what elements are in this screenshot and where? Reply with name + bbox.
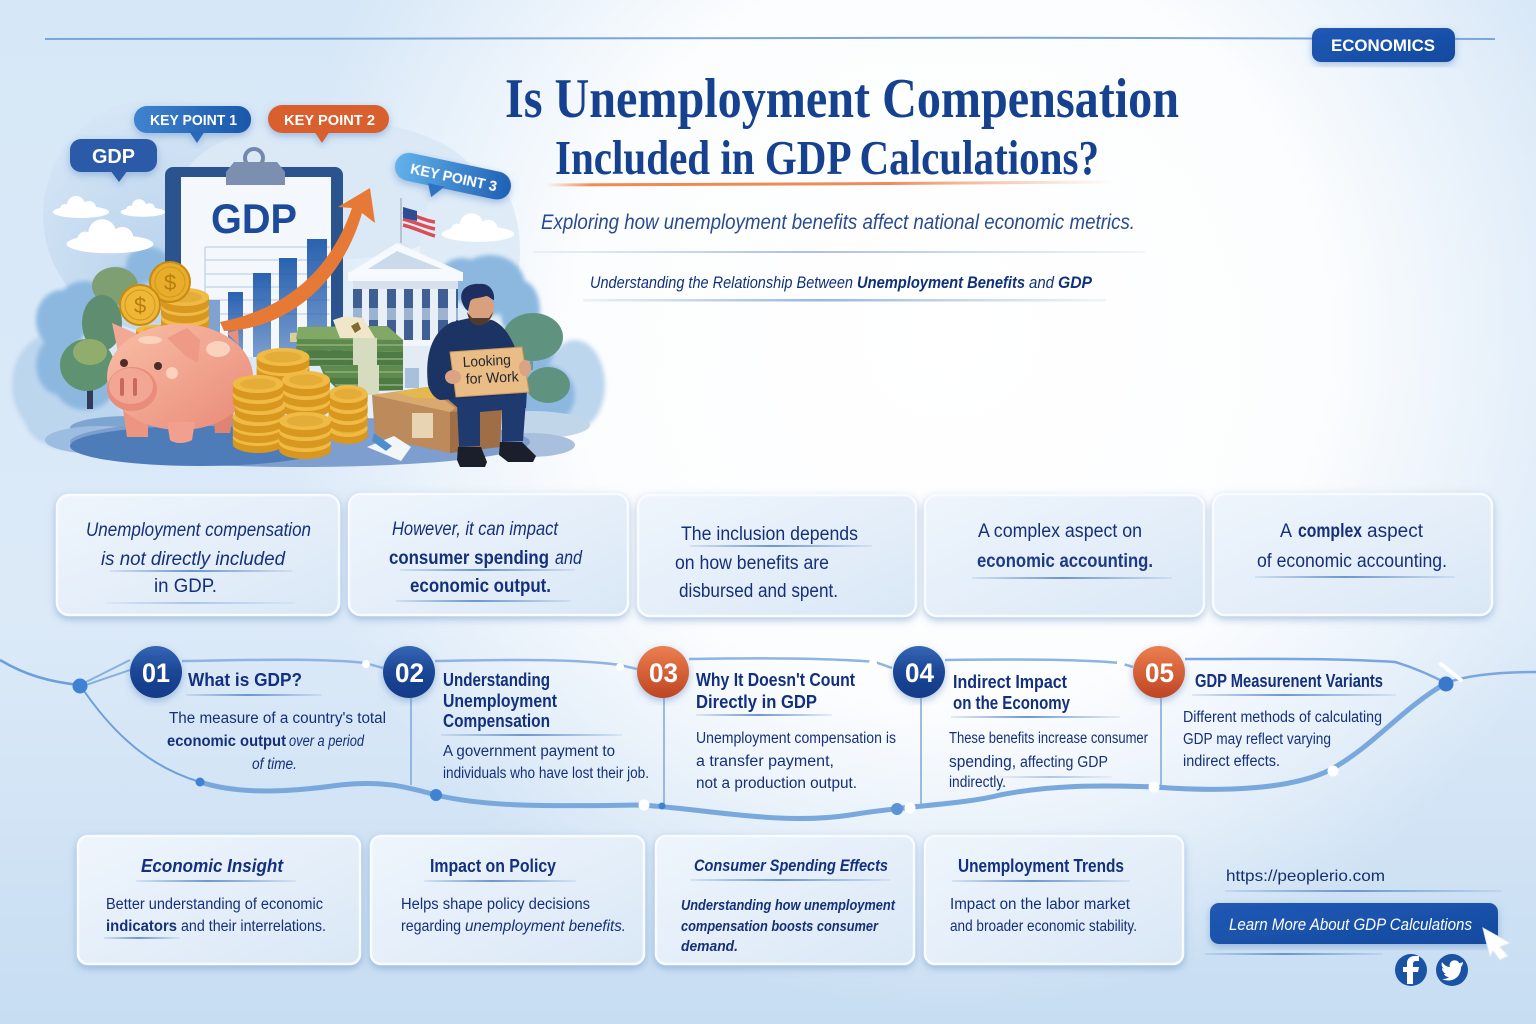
panel: card 1: in GDP. bbox=[154, 576, 217, 597]
step 01: What is GDP? bbox=[188, 670, 302, 690]
badge 03 bbox=[637, 646, 689, 698]
step 04: affecting GDP bbox=[1020, 754, 1108, 771]
panel: card 5 bbox=[1213, 494, 1492, 615]
icon: twitter bbox=[1436, 954, 1468, 986]
step 04: on the Economy bbox=[953, 693, 1070, 713]
rising arrow bbox=[220, 188, 375, 331]
step 02: individuals who have lost their job. bbox=[443, 765, 649, 782]
step 03: Directly in GDP bbox=[696, 692, 817, 712]
step 02: Compensation bbox=[443, 711, 550, 731]
clouds bbox=[53, 196, 514, 253]
man looking for work bbox=[427, 284, 536, 467]
title: Included in GDP Calculations? bbox=[555, 130, 1099, 185]
piggy bank bbox=[107, 323, 253, 443]
panel: economic insight bbox=[78, 836, 360, 964]
title bbox=[505, 68, 1179, 185]
capitol building with flag bbox=[348, 198, 463, 388]
tag: economics: ECONOMICS bbox=[1331, 36, 1435, 55]
panel: economic insight: Better understanding of economic bbox=[106, 896, 323, 913]
panel: impact on policy bbox=[371, 836, 644, 964]
panel: card 5: of economic accounting. bbox=[1257, 551, 1447, 572]
step 04 bbox=[893, 646, 1148, 791]
gold coins behind pig: $ bbox=[164, 270, 176, 295]
step 04: spending, bbox=[949, 753, 1016, 771]
panel: impact on policy: unemployment benefits. bbox=[465, 918, 626, 935]
badge 01: 01 bbox=[142, 658, 170, 688]
gold coins behind pig bbox=[120, 262, 209, 340]
boots bbox=[457, 442, 536, 467]
step 03: Why It Doesn't Count bbox=[696, 670, 855, 690]
panel: card 2: However, it can impact bbox=[392, 519, 559, 540]
sub-heading: GDP bbox=[1058, 273, 1093, 292]
panel: card 2 bbox=[349, 494, 628, 615]
badge 05: 05 bbox=[1145, 658, 1174, 688]
panel: card 3: disbursed and spent. bbox=[679, 581, 838, 602]
panel: consumer spending effects: Understanding how unemployment bbox=[681, 897, 896, 914]
panel: consumer spending effects bbox=[656, 836, 914, 964]
illustration: economy scene bbox=[12, 98, 605, 467]
step 02: A government payment to bbox=[443, 743, 615, 760]
sign: for Work bbox=[465, 369, 520, 388]
badge: key point 1: KEY POINT 1 bbox=[150, 113, 237, 129]
sub-heading: and bbox=[1029, 273, 1054, 292]
step 01 bbox=[130, 646, 386, 773]
step 02 bbox=[383, 646, 649, 782]
panel: economic insight: Economic Insight bbox=[141, 856, 284, 876]
title underline bbox=[546, 182, 1116, 185]
badge 03: 03 bbox=[649, 658, 678, 688]
button: learn more: Learn More About GDP Calculations bbox=[1229, 916, 1472, 934]
step 01: The measure of a country's total bbox=[169, 710, 386, 727]
top rule bbox=[45, 38, 1495, 39]
button: learn more bbox=[1210, 903, 1498, 944]
title: Is Unemployment Compensation bbox=[505, 68, 1179, 130]
badge 02: 02 bbox=[395, 658, 424, 688]
panel: card 4 bbox=[925, 495, 1204, 616]
step 01: economic output bbox=[167, 733, 286, 750]
legs bbox=[443, 390, 527, 447]
step 04: Indirect Impact bbox=[953, 672, 1067, 692]
step 05: indirect effects. bbox=[1183, 753, 1280, 770]
sub-heading bbox=[590, 273, 1093, 292]
green trees bbox=[60, 267, 570, 409]
panel: card 3: on how benefits are bbox=[675, 553, 829, 574]
cardboard box bbox=[372, 387, 502, 453]
panel: card 2: and bbox=[555, 548, 583, 569]
panel: unemployment trends: Unemployment Trends bbox=[958, 856, 1124, 876]
step 05: GDP Measurenent Variants bbox=[1195, 671, 1383, 691]
panel: card 3 bbox=[638, 495, 916, 616]
badge 04 bbox=[893, 646, 945, 698]
panel: unemployment trends bbox=[925, 836, 1183, 964]
panel: card 4: A complex aspect on bbox=[978, 521, 1142, 542]
badge 02 bbox=[383, 646, 435, 698]
step 03 bbox=[637, 646, 896, 792]
clipboard with GDP chart bbox=[165, 149, 343, 357]
panel: impact on policy: Impact on Policy bbox=[430, 856, 556, 876]
sign bbox=[450, 347, 529, 397]
website link: https://peoplerio.com bbox=[1226, 868, 1385, 885]
badge 05 bbox=[1133, 646, 1185, 698]
panel: unemployment trends: and broader economic stability. bbox=[950, 918, 1137, 935]
cash stack bbox=[290, 316, 403, 395]
panel: unemployment trends: Impact on the labor market bbox=[950, 896, 1131, 913]
step 01: of time. bbox=[252, 756, 297, 773]
panel: consumer spending effects: compensation boosts consumer bbox=[681, 918, 879, 935]
badge: key point 2 bbox=[268, 105, 389, 143]
panel: economic insight: indicators bbox=[106, 918, 177, 935]
backdrop blobs bbox=[12, 98, 605, 450]
panel: card 3: The inclusion depends bbox=[681, 524, 858, 545]
badge 01 bbox=[130, 646, 182, 698]
sub-heading: Understanding the Relationship Between bbox=[590, 273, 853, 292]
panel: consumer spending effects: Consumer Spending Effects bbox=[694, 856, 888, 875]
panel: card 5: aspect bbox=[1367, 521, 1424, 542]
panel: card 1 bbox=[57, 495, 339, 615]
badge: key point 3 bbox=[390, 150, 514, 213]
step 02: Understanding bbox=[443, 670, 550, 690]
step 02: Unemployment bbox=[443, 691, 557, 711]
step 04: indirectly. bbox=[949, 774, 1006, 791]
panel: card 1: Unemployment compensation bbox=[86, 520, 311, 541]
head bbox=[461, 284, 494, 326]
step 04: These benefits increase consumer bbox=[949, 730, 1148, 747]
badge 04: 04 bbox=[905, 658, 934, 688]
step 05 bbox=[1133, 646, 1396, 770]
panel: consumer spending effects: demand. bbox=[681, 938, 738, 955]
gold coin stacks bbox=[233, 348, 368, 459]
panel: impact on policy: regarding bbox=[401, 918, 461, 935]
sign: Looking bbox=[462, 353, 511, 371]
badge: key point 3: KEY POINT 3 bbox=[409, 161, 498, 195]
badge: GDP bbox=[70, 139, 157, 182]
panel: card 1: is not directly included bbox=[101, 549, 286, 570]
step 05: Different methods of calculating bbox=[1183, 709, 1382, 726]
panel: impact on policy: Helps shape policy decisions bbox=[401, 896, 590, 913]
panel: card 5: A bbox=[1280, 521, 1292, 542]
tag: economics bbox=[1312, 28, 1455, 62]
panel: card 2: economic output. bbox=[410, 576, 551, 597]
panel: card 2: consumer spending bbox=[389, 548, 549, 569]
step 03: a transfer payment, bbox=[696, 753, 834, 770]
badge: key point 2: KEY POINT 2 bbox=[284, 113, 375, 129]
ground shadow bbox=[45, 411, 590, 467]
torso bbox=[427, 318, 516, 400]
gold coins behind pig: $ bbox=[134, 293, 146, 318]
step 05: GDP may reflect varying bbox=[1183, 731, 1331, 748]
step 03: Unemployment compensation is bbox=[696, 730, 896, 747]
step 01: over a period bbox=[289, 733, 365, 750]
badge: key point 1 bbox=[134, 106, 251, 143]
sub-heading: Unemployment Benefits bbox=[857, 273, 1025, 292]
icon: facebook bbox=[1395, 954, 1427, 986]
step 03: not a production output. bbox=[696, 775, 857, 792]
paper and tool bbox=[367, 433, 411, 461]
badge: GDP: GDP bbox=[92, 146, 135, 168]
panel: card 4: economic accounting. bbox=[977, 551, 1153, 572]
panel: economic insight: and their interrelations. bbox=[181, 918, 326, 935]
timeline nodes bbox=[72, 659, 1461, 815]
subtitle: Exploring how unemployment benefits affect national economic metrics. bbox=[541, 210, 1135, 234]
timeline curve bbox=[0, 658, 1536, 819]
panel: card 5: complex bbox=[1298, 521, 1362, 542]
icon: cursor bbox=[1483, 928, 1510, 960]
clipboard with GDP chart: GDP bbox=[211, 195, 297, 242]
